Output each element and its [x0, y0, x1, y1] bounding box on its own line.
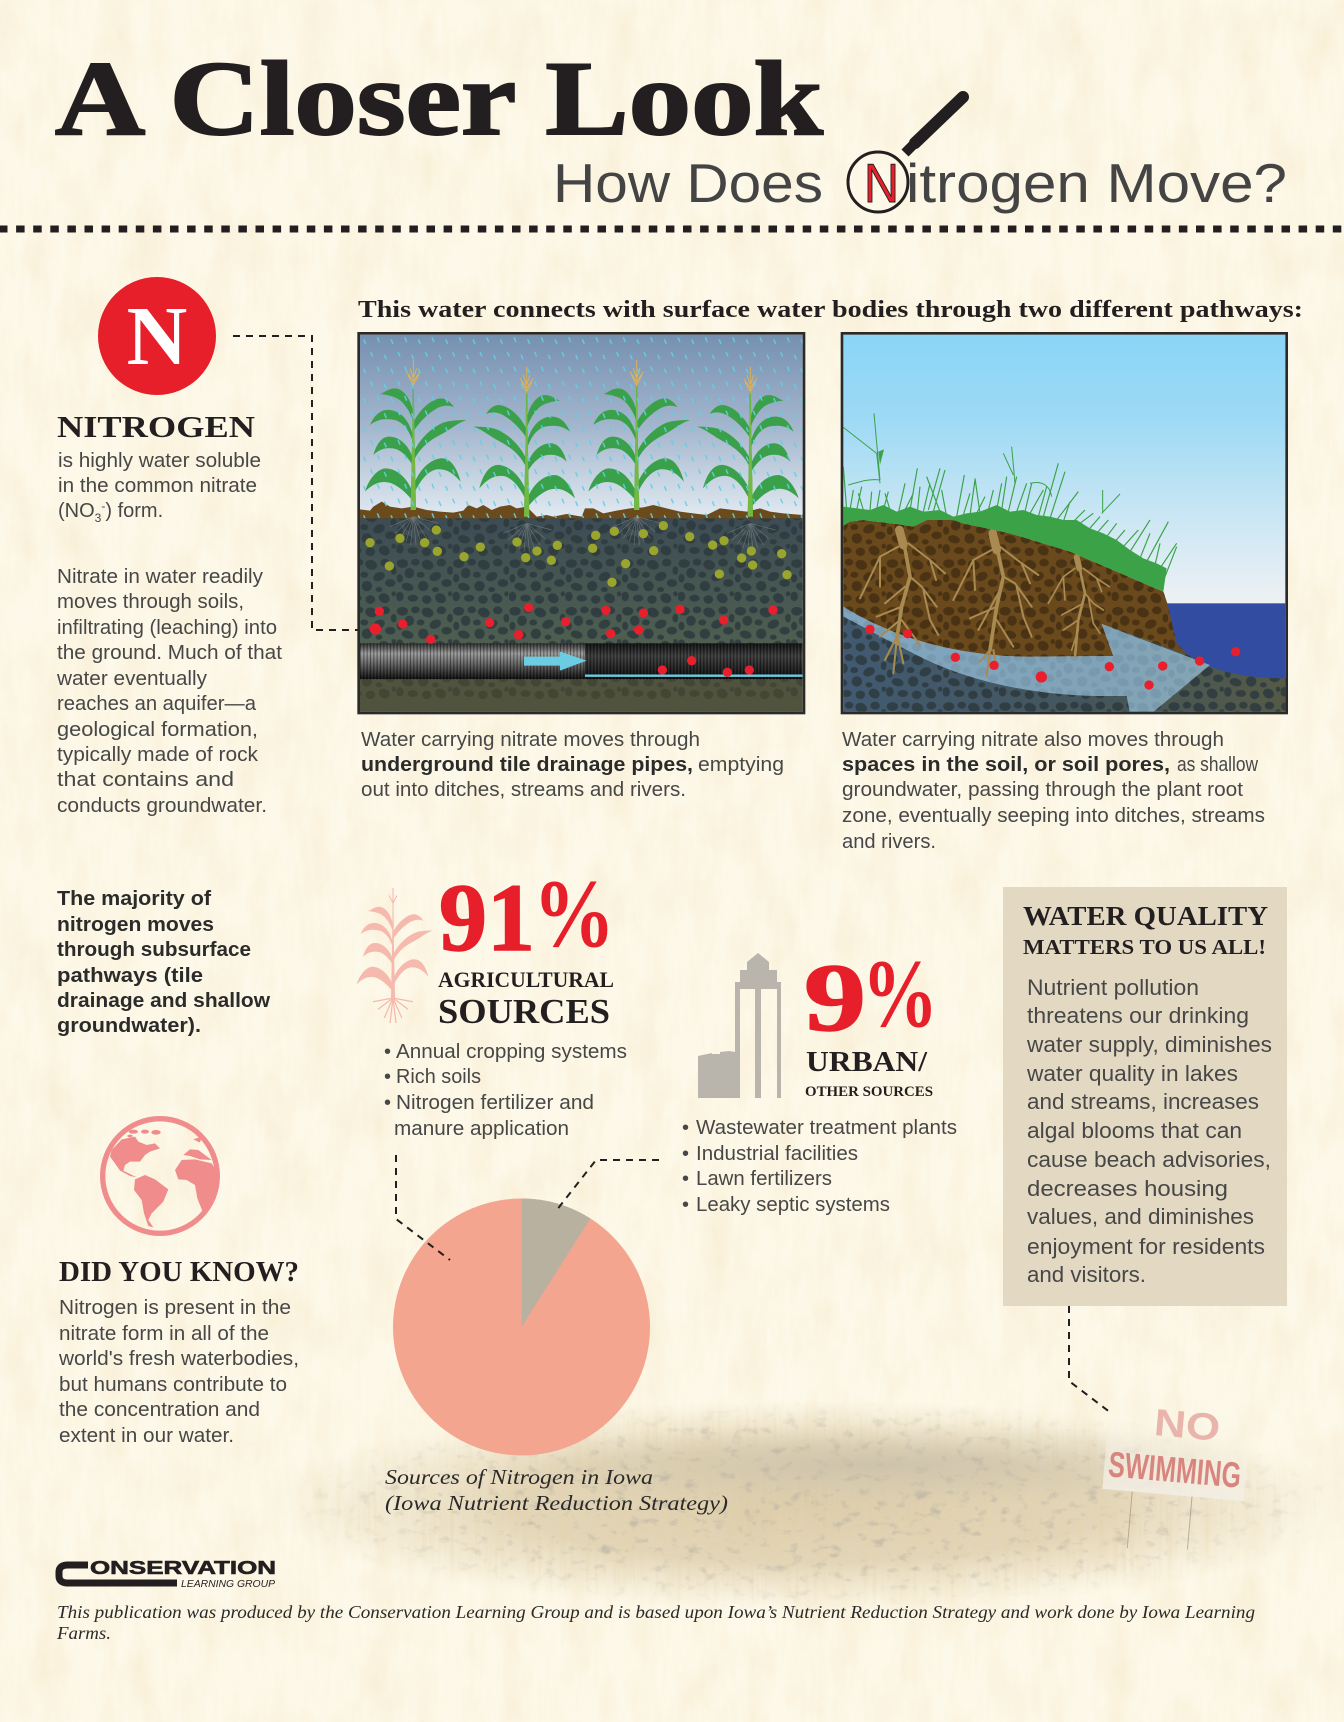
- logo: conservation learning group: [59, 1558, 276, 1590]
- logo: conservation learning group: LEARNING GROUP: [181, 1579, 275, 1590]
- list: urban sources: Leaky septic systems: [696, 1194, 890, 1216]
- text: water quality: cause beach advisories,: [1027, 1147, 1271, 1172]
- heading: nitrogen: NITROGEN: [57, 409, 255, 444]
- text: majority callout: groundwater).: [57, 1015, 201, 1037]
- list: agricultural sources: manure application: [394, 1118, 569, 1140]
- text: water quality: decreases housing: [1027, 1176, 1228, 1201]
- text: water quality: values, and diminishes: [1027, 1204, 1254, 1229]
- text: soil pores caption: Water carrying nitrate also moves through: [842, 729, 1224, 751]
- ground photo with no swimming sign: [270, 1389, 1344, 1610]
- text: nitrogen description: (NO: [58, 500, 95, 522]
- panel: tile drainage illustration: [359, 333, 804, 713]
- text: majority callout: The majority of: [57, 888, 211, 910]
- text: majority callout: drainage and shallow: [57, 990, 270, 1012]
- heading: water quality: [1023, 901, 1268, 959]
- list: agricultural sources: [384, 1041, 627, 1140]
- stat: 91 percent: [439, 860, 615, 971]
- label: urban sources: URBAN/: [806, 1046, 928, 1078]
- label: urban sources: OTHER SOURCES: [805, 1084, 933, 1100]
- list: urban sources: Industrial facilities: [696, 1143, 858, 1165]
- plant roots: [860, 530, 1109, 677]
- heading: water quality: WATER QUALITY: [1023, 901, 1268, 931]
- footer credit: This publication was produced by the Conservation Learning Group and is based upon Iowa’s Nutrient Reduction Strategy and work done by Iowa Learning: [57, 1602, 1255, 1622]
- connector: water quality to sign: [1069, 1306, 1111, 1413]
- connector: urban to pie: [556, 1160, 659, 1211]
- text: nitrogen description: 3: [95, 511, 102, 525]
- text: majority callout: through subsurface: [57, 939, 251, 961]
- list: urban sources: Wastewater treatment plants: [696, 1117, 957, 1139]
- rock layer: [843, 607, 1287, 713]
- label: agricultural sources: AGRICULTURAL: [438, 967, 614, 992]
- sign board: NO: [1152, 1402, 1222, 1450]
- panel: water quality: [1003, 887, 1287, 1306]
- sign board: SWIMMING: [1107, 1443, 1243, 1496]
- text: nitrate movement: that contains and: [57, 769, 234, 791]
- list: urban sources: •: [682, 1117, 689, 1139]
- text: nitrate movement: reaches an aquifer—a: [57, 693, 257, 715]
- text: soil pores caption: as shallow: [1177, 754, 1258, 776]
- text: water quality: water quality in lakes: [1026, 1061, 1238, 1086]
- text: did you know: extent in our water.: [59, 1425, 234, 1447]
- footer credit: Farms.: [56, 1623, 111, 1643]
- connector: agricultural to pie: [396, 1155, 450, 1260]
- stat: 9 percent: [804, 940, 938, 1051]
- text: nitrate movement: infiltrating (leaching) into: [57, 617, 277, 639]
- subtitle: [553, 152, 1287, 214]
- text: nitrate movement: [56, 566, 282, 817]
- text: nitrate movement: the ground. Much of that: [57, 642, 282, 664]
- heading: pathways: This water connects with surface water bodies through two different pathways:: [358, 297, 1303, 323]
- text: nitrogen description: [58, 450, 261, 525]
- list: agricultural sources: •: [384, 1066, 391, 1088]
- text: water quality: [1026, 975, 1272, 1287]
- footer credit: [56, 1602, 1255, 1643]
- list: urban sources: •: [682, 1168, 689, 1190]
- nitrate dots: [865, 625, 1240, 690]
- list: agricultural sources: •: [384, 1041, 391, 1063]
- text: did you know: but humans contribute to: [59, 1374, 287, 1396]
- text: tile drainage caption: underground tile drainage pipes,: [361, 754, 693, 776]
- stat: 91 percent: %: [533, 860, 615, 968]
- text: nitrogen description: is highly water soluble: [58, 450, 261, 472]
- label: urban sources: [805, 1046, 933, 1100]
- text: water quality: algal blooms that can: [1027, 1118, 1242, 1143]
- title: A Closer Look: [55, 40, 823, 157]
- corn plants: [365, 360, 799, 552]
- pie chart: sources of nitrogen: [393, 1198, 650, 1456]
- icon: nitrogen circle: [98, 277, 216, 395]
- text: tile drainage caption: [361, 729, 784, 801]
- text: tile drainage caption: emptying: [698, 754, 784, 776]
- connector: nitrogen to tile panel: [233, 336, 358, 630]
- text: nitrogen description: ) form.: [105, 500, 163, 522]
- stat: 9 percent: 9: [804, 944, 866, 1051]
- text: did you know: world's fresh waterbodies,: [58, 1348, 299, 1370]
- text: did you know: the concentration and: [59, 1399, 260, 1421]
- heading: water quality: MATTERS TO US ALL!: [1023, 935, 1266, 959]
- list: agricultural sources: Annual cropping systems: [396, 1041, 627, 1063]
- list: agricultural sources: Rich soils: [396, 1066, 481, 1088]
- icon: city skyline: [698, 953, 781, 1098]
- sign board: [1097, 1389, 1253, 1558]
- caption: pie chart: (Iowa Nutrient Reduction Strategy): [385, 1491, 728, 1515]
- organic nitrogen dots: [365, 521, 792, 587]
- arrow: water flow: [524, 652, 587, 671]
- caption: pie chart: Sources of Nitrogen in Iowa: [385, 1465, 653, 1489]
- text: nitrate movement: geological formation,: [57, 719, 258, 741]
- label: agricultural sources: [438, 967, 614, 1031]
- text: nitrogen description: in the common nitrate: [58, 475, 257, 497]
- caption: pie chart: [385, 1465, 728, 1515]
- text: nitrogen description: -: [101, 499, 105, 513]
- text: nitrate movement: conducts groundwater.: [57, 795, 267, 817]
- stat: 9 percent: %: [862, 940, 938, 1048]
- icon: magnifying glass: [848, 97, 963, 212]
- text: soil pores caption: [842, 729, 1265, 853]
- text: tile drainage caption: Water carrying nitrate moves through: [361, 729, 700, 751]
- soil layer: [843, 520, 1188, 657]
- text: water quality: threatens our drinking: [1027, 1003, 1249, 1028]
- text: water quality: water supply, diminishes: [1026, 1032, 1272, 1057]
- subtitle: itrogen Move?: [906, 152, 1287, 214]
- text: majority callout: [57, 888, 270, 1037]
- list: urban sources: [682, 1117, 957, 1216]
- list: agricultural sources: Nitrogen fertilizer and: [396, 1092, 594, 1114]
- list: agricultural sources: •: [384, 1092, 391, 1114]
- icon: globe: [103, 1119, 217, 1233]
- text: nitrate movement: water eventually: [56, 668, 207, 690]
- list: urban sources: Lawn fertilizers: [696, 1168, 832, 1190]
- panel: shallow groundwater illustration: [842, 333, 1287, 713]
- text: soil pores caption: groundwater, passing through the plant root: [842, 779, 1243, 801]
- text: did you know: [58, 1297, 299, 1447]
- stat: 91 percent: 91: [439, 864, 535, 971]
- logo: conservation learning group: ONSERVATION: [90, 1558, 276, 1578]
- tile drainage pipe: [360, 643, 803, 679]
- water line in pipe: [585, 674, 802, 677]
- text: soil pores caption: spaces in the soil, or soil pores,: [842, 754, 1170, 776]
- subtitle: N: [864, 152, 899, 214]
- text: soil pores caption: and rivers.: [842, 831, 936, 853]
- text: did you know: Nitrogen is present in the: [59, 1297, 291, 1319]
- text: nitrate movement: typically made of rock: [57, 744, 259, 766]
- nitrate dots: [370, 603, 778, 677]
- text: water quality: and streams, increases: [1027, 1089, 1259, 1114]
- arrow: groundwater flow: [843, 607, 1210, 713]
- text: nitrate movement: moves through soils,: [57, 591, 244, 613]
- grass: [843, 413, 1177, 592]
- text: soil pores caption: zone, eventually seeping into ditches, streams: [842, 805, 1265, 827]
- text: water quality: enjoyment for residents: [1027, 1234, 1265, 1259]
- list: urban sources: •: [682, 1194, 689, 1216]
- rain: [360, 335, 803, 518]
- text: water quality: and visitors.: [1027, 1262, 1146, 1287]
- soil crust: [360, 502, 803, 518]
- icon: pink corn plant: [357, 888, 433, 1023]
- text: nitrate movement: Nitrate in water readily: [57, 566, 263, 588]
- text: tile drainage caption: out into ditches, streams and rivers.: [361, 779, 686, 801]
- list: urban sources: •: [682, 1143, 689, 1165]
- subtitle: How Does: [553, 152, 823, 214]
- text: majority callout: nitrogen moves: [57, 914, 214, 936]
- icon: nitrogen circle: N: [127, 290, 187, 383]
- heading: did you know: DID YOU KNOW?: [59, 1257, 299, 1288]
- text: water quality: Nutrient pollution: [1027, 975, 1199, 1000]
- text: did you know: nitrate form in all of the: [59, 1323, 269, 1345]
- label: agricultural sources: SOURCES: [438, 992, 610, 1031]
- text: majority callout: pathways (tile: [57, 965, 203, 987]
